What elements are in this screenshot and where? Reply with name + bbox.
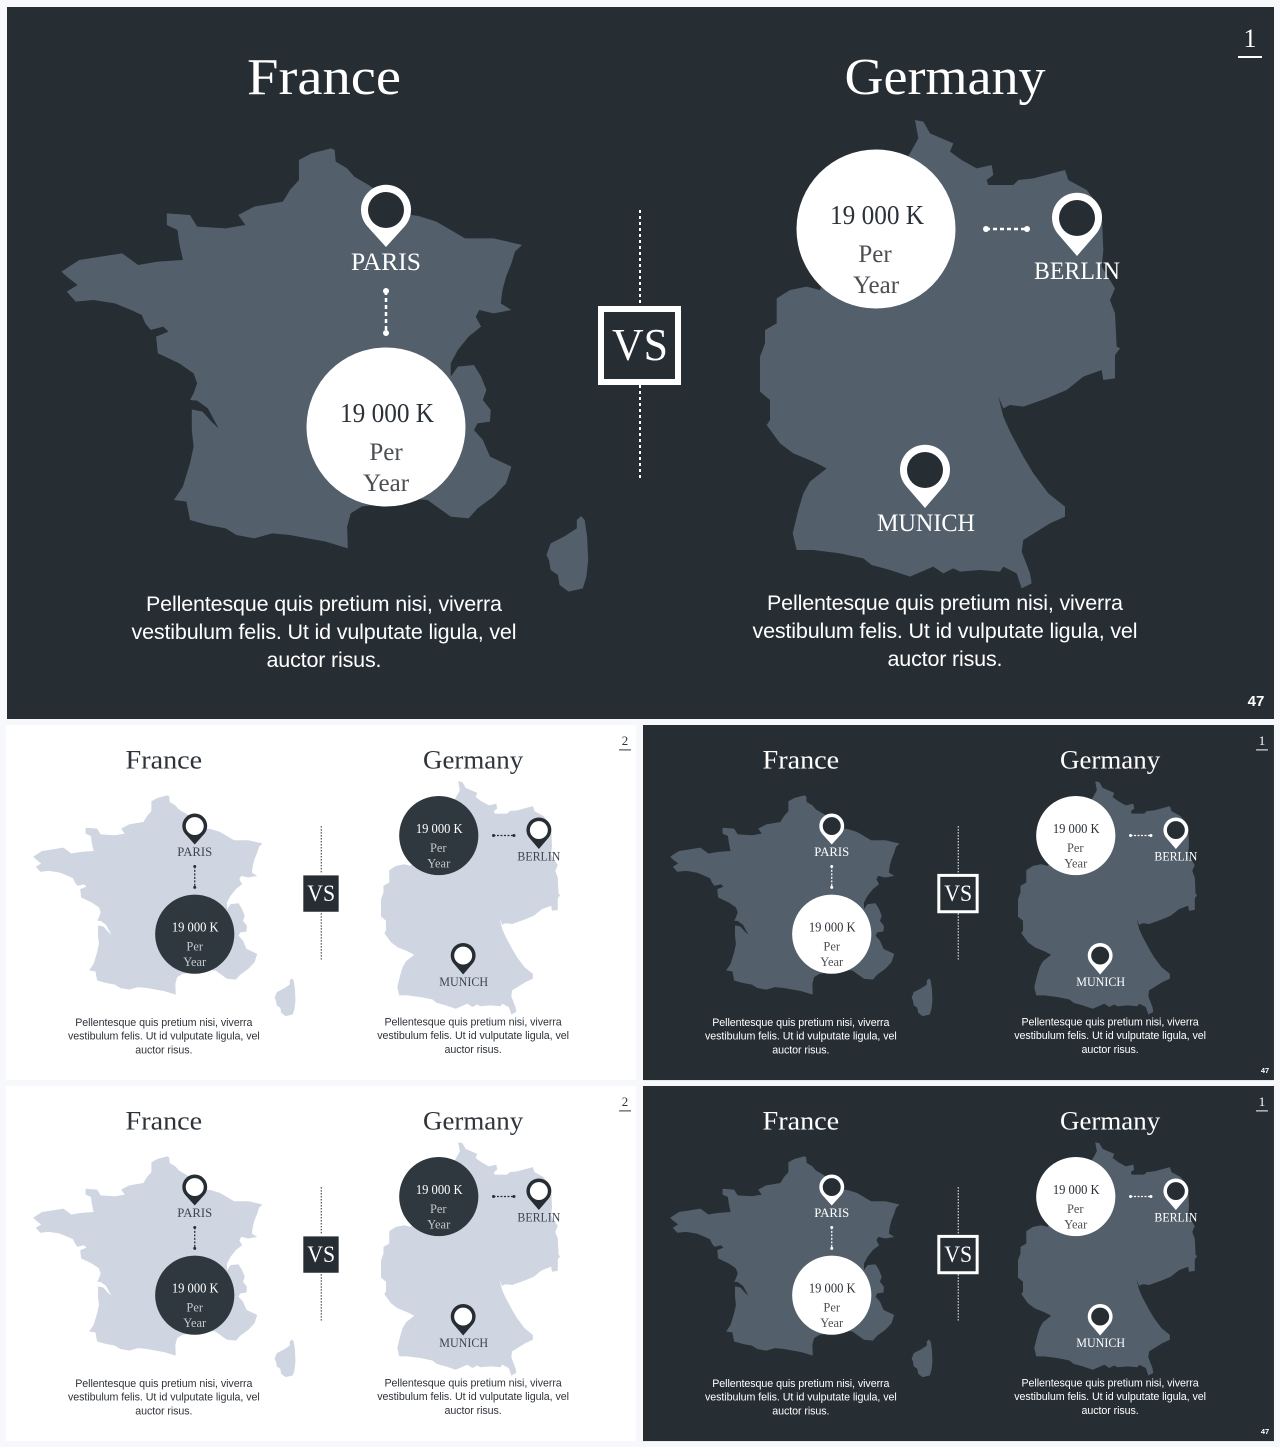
VS badge — [601, 210, 678, 481]
pin: Paris — [182, 814, 207, 845]
label: Paris: PARIS — [351, 249, 421, 276]
text block: France: vestibulum felis. Ut id vulputate ligula, vel — [68, 1031, 260, 1043]
text block: Germany — [1014, 1377, 1206, 1417]
text block: France: auctor risus. — [135, 1406, 193, 1418]
text block: Germany: vestibulum felis. Ut id vulputate ligula, vel — [1014, 1030, 1206, 1042]
heading: Germany: Germany — [1060, 1106, 1160, 1135]
heading: France: France — [126, 1106, 202, 1135]
text block: France: vestibulum felis. Ut id vulputate ligula, vel — [132, 620, 516, 644]
stat circle: Germany: Per — [1067, 841, 1084, 855]
stat circle: France — [792, 895, 871, 974]
connector: Paris to circle — [830, 865, 833, 889]
map: Germany — [760, 120, 1120, 588]
stat circle: Germany: Year — [427, 856, 451, 870]
stat circle: France: 19 000 K — [340, 398, 434, 428]
pin: Paris — [819, 1175, 844, 1206]
connector: circle to Berlin — [1129, 1195, 1152, 1198]
text block: Germany: auctor risus. — [888, 647, 1002, 671]
map: France — [33, 795, 295, 1016]
map: France — [61, 148, 588, 592]
heading: Germany: Germany — [423, 745, 523, 774]
map: France — [33, 1156, 295, 1377]
stat circle: France: Per — [823, 940, 841, 954]
stat circle: Germany: Year — [853, 272, 900, 299]
panel: light slide, row 1 — [6, 725, 636, 1080]
stat circle: Germany: 19 000 K — [1053, 821, 1100, 836]
label: Berlin: BERLIN — [1154, 849, 1197, 863]
text block: France — [132, 592, 516, 672]
text block: Germany: vestibulum felis. Ut id vulputate ligula, vel — [377, 1391, 569, 1403]
VS badge — [303, 1187, 339, 1322]
stat circle: France: 19 000 K — [172, 920, 219, 935]
heading: France: France — [763, 745, 839, 774]
VS badge: VS — [612, 319, 668, 370]
map: Germany — [381, 1142, 560, 1376]
connector: circle to Berlin — [983, 226, 1030, 232]
slide number — [1238, 24, 1262, 58]
label: Munich: MUNICH — [439, 1336, 488, 1350]
text block: France: Pellentesque quis pretium nisi, viverra — [712, 1017, 890, 1029]
label: Paris: PARIS — [177, 845, 212, 859]
map: France — [670, 1156, 932, 1377]
text block: France — [68, 1378, 260, 1418]
text block: Germany — [377, 1377, 569, 1417]
text block: France — [705, 1378, 897, 1418]
stat circle: Germany — [1036, 796, 1115, 875]
stat circle: Germany: Per — [858, 241, 892, 268]
text block: Germany: vestibulum felis. Ut id vulputate ligula, vel — [377, 1030, 569, 1042]
map: Germany — [381, 781, 560, 1015]
heading: France: France — [247, 49, 401, 106]
text block: Germany — [377, 1016, 569, 1056]
stat circle: Germany: Per — [430, 841, 447, 855]
text block: Germany: vestibulum felis. Ut id vulputate ligula, vel — [752, 619, 1138, 643]
text block: France: auctor risus. — [772, 1406, 830, 1418]
pin: Munich — [451, 943, 476, 974]
slide number — [619, 733, 631, 750]
text block: Germany: auctor risus. — [444, 1044, 502, 1056]
text block: Germany: Pellentesque quis pretium nisi, viverra — [1021, 1016, 1199, 1028]
text block: France — [68, 1017, 260, 1057]
slide number: 1 — [1259, 733, 1265, 748]
stat circle: France: 19 000 K — [809, 920, 856, 935]
stat circle: Germany: Year — [1064, 1217, 1088, 1231]
stat circle: France: 19 000 K — [172, 1281, 219, 1296]
text block: Germany: Pellentesque quis pretium nisi, viverra — [767, 591, 1123, 615]
connector: circle to Berlin — [492, 834, 515, 837]
label: Paris: PARIS — [814, 845, 849, 859]
pin: Berlin — [1163, 1179, 1188, 1210]
page number: 47 — [1261, 1066, 1269, 1075]
stat circle: France: Year — [183, 1316, 207, 1330]
slide number: 1 — [1244, 24, 1256, 53]
stat circle: Germany: 19 000 K — [416, 1182, 463, 1197]
text block: Germany: Pellentesque quis pretium nisi, viverra — [1021, 1377, 1199, 1389]
pin: Berlin — [1163, 818, 1188, 849]
text block: France: vestibulum felis. Ut id vulputate ligula, vel — [705, 1392, 897, 1404]
stat circle: Germany: Year — [1064, 856, 1088, 870]
stat circle: France: Per — [186, 940, 204, 954]
stat circle: France: 19 000 K — [809, 1281, 856, 1296]
stat circle: France — [155, 1256, 234, 1335]
text block: Germany: Pellentesque quis pretium nisi, viverra — [384, 1377, 562, 1389]
text block: Germany: auctor risus. — [1081, 1044, 1139, 1056]
text block: Germany: auctor risus. — [444, 1405, 502, 1417]
panel: light slide, row 2 — [6, 1086, 636, 1441]
label: Munich: MUNICH — [1076, 1336, 1125, 1350]
stat circle: France: Year — [183, 955, 207, 969]
label: Berlin: BERLIN — [1154, 1210, 1197, 1224]
slide number: 2 — [622, 1094, 628, 1109]
label: Berlin: BERLIN — [1034, 258, 1120, 285]
label: Paris: PARIS — [814, 1206, 849, 1220]
map: France — [670, 795, 932, 1016]
text block: Germany — [752, 591, 1138, 671]
text block: Germany: vestibulum felis. Ut id vulputate ligula, vel — [1014, 1391, 1206, 1403]
text block: France: vestibulum felis. Ut id vulputate ligula, vel — [705, 1031, 897, 1043]
text block: France: Pellentesque quis pretium nisi, viverra — [146, 592, 502, 616]
connector: Paris to circle — [830, 1226, 833, 1250]
heading: France: France — [126, 745, 202, 774]
stat circle: Germany: Per — [1067, 1202, 1084, 1216]
map: Germany — [1018, 1142, 1197, 1376]
text block: France: auctor risus. — [772, 1045, 830, 1057]
pin: Paris — [819, 814, 844, 845]
stat circle: Germany — [1036, 1157, 1115, 1236]
heading: France: France — [763, 1106, 839, 1135]
label: Paris: PARIS — [177, 1206, 212, 1220]
label: Munich: MUNICH — [1076, 975, 1125, 989]
stat circle: Germany — [399, 1157, 478, 1236]
panel: large dark slide — [7, 7, 1274, 719]
stat circle: Germany: 19 000 K — [416, 821, 463, 836]
text block: France: auctor risus. — [266, 648, 382, 672]
slide number — [619, 1094, 631, 1111]
connector: Paris to circle — [193, 1226, 196, 1250]
stat circle: France: Per — [186, 1301, 204, 1315]
page number: 47 — [1248, 693, 1264, 710]
pin: Berlin — [1052, 193, 1102, 256]
label: Munich: MUNICH — [439, 975, 488, 989]
VS badge — [939, 1187, 977, 1322]
text block: Germany: auctor risus. — [1081, 1405, 1139, 1417]
stat circle: France — [792, 1256, 871, 1335]
text block: France: Pellentesque quis pretium nisi, viverra — [75, 1017, 253, 1029]
label: Munich: MUNICH — [877, 510, 975, 537]
text block: Germany — [1014, 1016, 1206, 1056]
VS badge: VS — [307, 881, 335, 906]
stat circle: France — [306, 348, 466, 506]
connector: circle to Berlin — [1129, 834, 1152, 837]
pin: Berlin — [526, 1179, 551, 1210]
pin: Munich — [1088, 1304, 1113, 1335]
pin: Munich — [451, 1304, 476, 1335]
heading: Germany: Germany — [1060, 745, 1160, 774]
VS badge — [939, 826, 977, 961]
stat circle: France: Year — [820, 955, 844, 969]
heading: Germany: Germany — [844, 49, 1046, 106]
stat circle: Germany — [796, 150, 956, 308]
text block: France: Pellentesque quis pretium nisi, viverra — [75, 1378, 253, 1390]
pin: Munich — [1088, 943, 1113, 974]
label: Berlin: BERLIN — [517, 849, 560, 863]
connector: circle to Berlin — [492, 1195, 515, 1198]
VS badge — [303, 826, 339, 961]
page number: 47 — [1261, 1427, 1269, 1436]
text block: France: Pellentesque quis pretium nisi, viverra — [712, 1378, 890, 1390]
panel: dark slide, row 2 — [643, 1086, 1274, 1441]
VS badge: VS — [307, 1242, 335, 1267]
stat circle: France: Year — [363, 470, 410, 497]
stat circle: Germany: Year — [427, 1217, 451, 1231]
stat circle: France: Year — [820, 1316, 844, 1330]
stat circle: Germany: 19 000 K — [830, 200, 924, 230]
stat circle: France — [155, 895, 234, 974]
stat circle: France: Per — [369, 439, 403, 466]
stat circle: France: Per — [823, 1301, 841, 1315]
slide number: 1 — [1259, 1094, 1265, 1109]
text block: France: vestibulum felis. Ut id vulputate ligula, vel — [68, 1392, 260, 1404]
slide number — [1256, 1094, 1268, 1111]
stat circle: Germany — [399, 796, 478, 875]
stat circle: Germany: Per — [430, 1202, 447, 1216]
text block: Germany: Pellentesque quis pretium nisi, viverra — [384, 1016, 562, 1028]
text block: France: auctor risus. — [135, 1045, 193, 1057]
label: Berlin: BERLIN — [517, 1210, 560, 1224]
pin: Paris — [182, 1175, 207, 1206]
VS badge: VS — [944, 881, 972, 906]
connector: Paris to circle — [193, 865, 196, 889]
connector: Paris to circle — [383, 288, 389, 336]
text block: France — [705, 1017, 897, 1057]
panel: dark slide, row 1 — [643, 725, 1274, 1080]
pin: Berlin — [526, 818, 551, 849]
pin: Paris — [361, 185, 411, 247]
slide number: 2 — [622, 733, 628, 748]
map: Germany — [1018, 781, 1197, 1015]
slide number — [1256, 733, 1268, 750]
stat circle: Germany: 19 000 K — [1053, 1182, 1100, 1197]
VS badge: VS — [944, 1242, 972, 1267]
pin: Munich — [900, 445, 950, 508]
heading: Germany: Germany — [423, 1106, 523, 1135]
